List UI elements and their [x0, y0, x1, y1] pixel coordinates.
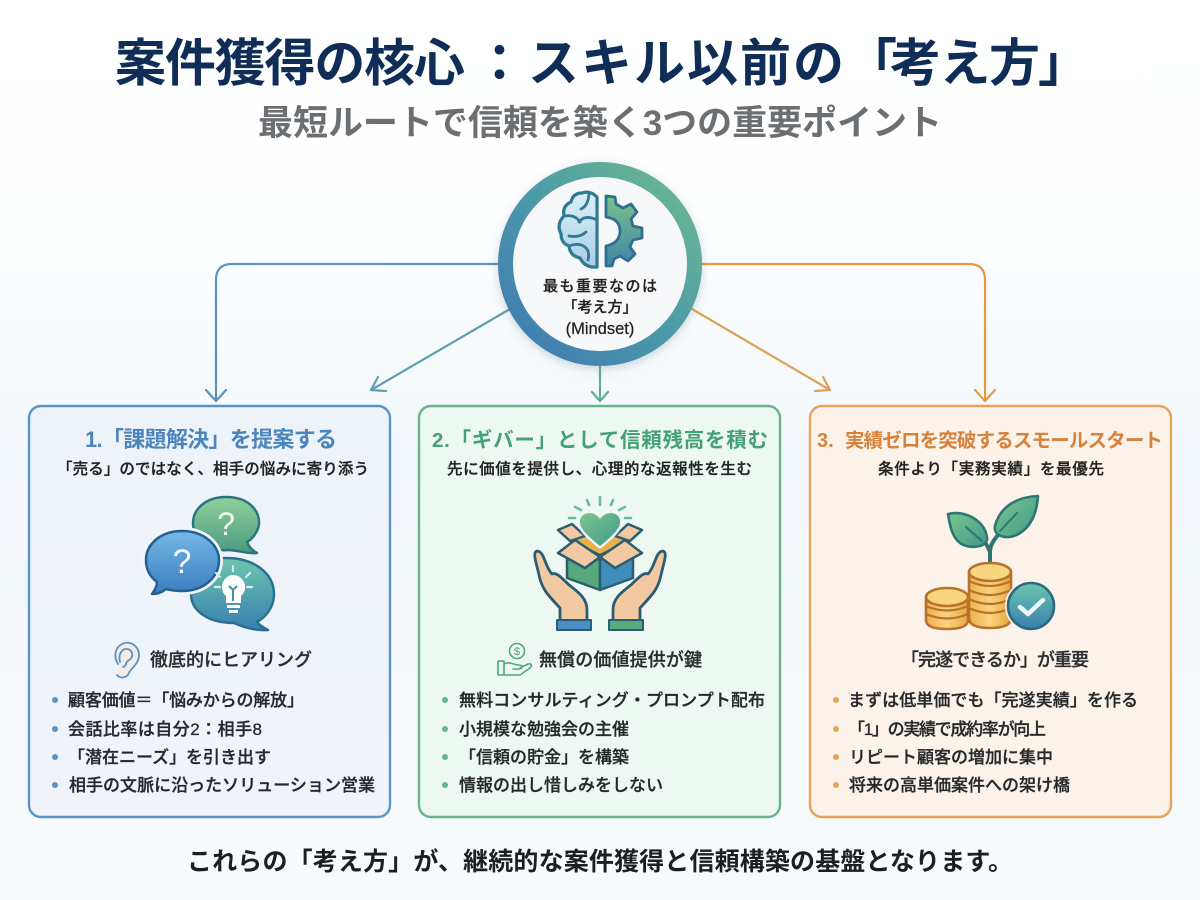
bullet list: 顧客価値＝「悩みからの解放」 — [68, 691, 304, 710]
hub text: (Mindset) — [566, 320, 634, 338]
arrow: to panel 1 (diagonal) — [371, 309, 510, 391]
arrow: to panel 3 (diagonal) — [692, 309, 830, 391]
title — [115, 35, 1089, 92]
icon: speech bubbles: ? — [217, 506, 235, 542]
panel 3: small start — [810, 406, 1171, 817]
bullet list — [52, 691, 375, 795]
hub text: 最も重要なのは — [543, 278, 657, 295]
bullet list: 会話比率は自分2：相手8 — [68, 720, 262, 739]
bullet list: 情報の出し惜しみをしない — [459, 776, 663, 795]
panel 1: problem solving — [29, 406, 390, 817]
panel 2 heading: 2.「ギバー」として信頼残高を積む — [432, 428, 768, 452]
completion heading: 「完遂できるか」が重要 — [901, 649, 1089, 670]
free value heading: 無償の価値提供が鍵 — [539, 649, 702, 670]
hub text — [543, 278, 657, 338]
arrow: to panel 2 — [592, 362, 608, 401]
title: 「 — [846, 35, 897, 92]
arrow: to panel 1 (long) — [206, 264, 500, 401]
panel 2: giver — [419, 406, 780, 817]
panel 3 subheading: 条件より「実務実績」を最優先 — [878, 460, 1104, 478]
bullet list: 「信頼の貯金」を構築 — [459, 748, 629, 767]
bullet list: 無料コンサルティング・プロンプト配布 — [459, 691, 765, 710]
title: ： — [474, 35, 525, 92]
panel 3 heading: 実績ゼロを突破するスモールスタート — [845, 429, 1163, 452]
title: 」 — [1038, 35, 1089, 92]
hub text: 「考え方」 — [562, 299, 638, 316]
bullet list: 将来の高単価案件への架け橋 — [849, 776, 1070, 795]
panel 1 subheading: 「売る」のではなく、相手の悩みに寄り添う — [57, 460, 369, 478]
icon: sprout on coins with check — [926, 496, 1057, 632]
bullet list: 相手の文脈に沿ったソリューション営業 — [69, 776, 375, 795]
icon: ear — [115, 643, 139, 677]
bullet list: 小規模な勉強会の主催 — [459, 720, 629, 739]
footer message: これらの「考え方」が、継続的な案件獲得と信頼構築の基盤となります。 — [187, 847, 1013, 876]
icon: speech bubbles — [146, 497, 274, 630]
icon: speech bubbles: ? — [173, 543, 191, 581]
icon: brain and gear — [559, 192, 642, 267]
panel 3 heading: 3. — [817, 430, 834, 452]
arrow: to panel 3 (long) — [700, 264, 995, 401]
icon: gift box with heart and hands — [535, 497, 665, 630]
title: 案件獲得の核心 — [115, 35, 465, 92]
dollar sign: $ — [514, 646, 520, 658]
central mindset hub — [498, 162, 702, 366]
bullet list: リピート顧客の増加に集中 — [849, 748, 1053, 767]
title: スキル以前の — [528, 35, 844, 92]
icon: hand with coin — [498, 644, 531, 675]
subtitle: 最短ルートで信頼を築く3つの重要ポイント — [258, 104, 942, 143]
bullet list: 「1」の実績で成約率が向上 — [848, 719, 1046, 739]
bullet list: まずは低単価でも「完遂実績」を作る — [848, 691, 1138, 710]
hearing heading: 徹底的にヒアリング — [150, 650, 312, 670]
bullet list — [833, 691, 1138, 795]
title: 考え方 — [890, 35, 1040, 92]
bullet list — [442, 691, 765, 795]
panel 2 subheading: 先に価値を提供し、心理的な返報性を生む — [447, 460, 752, 478]
panel 1 heading: 1.「課題解決」を提案する — [85, 427, 337, 452]
bullet list: 「潜在ニーズ」を引き出す — [68, 747, 271, 767]
